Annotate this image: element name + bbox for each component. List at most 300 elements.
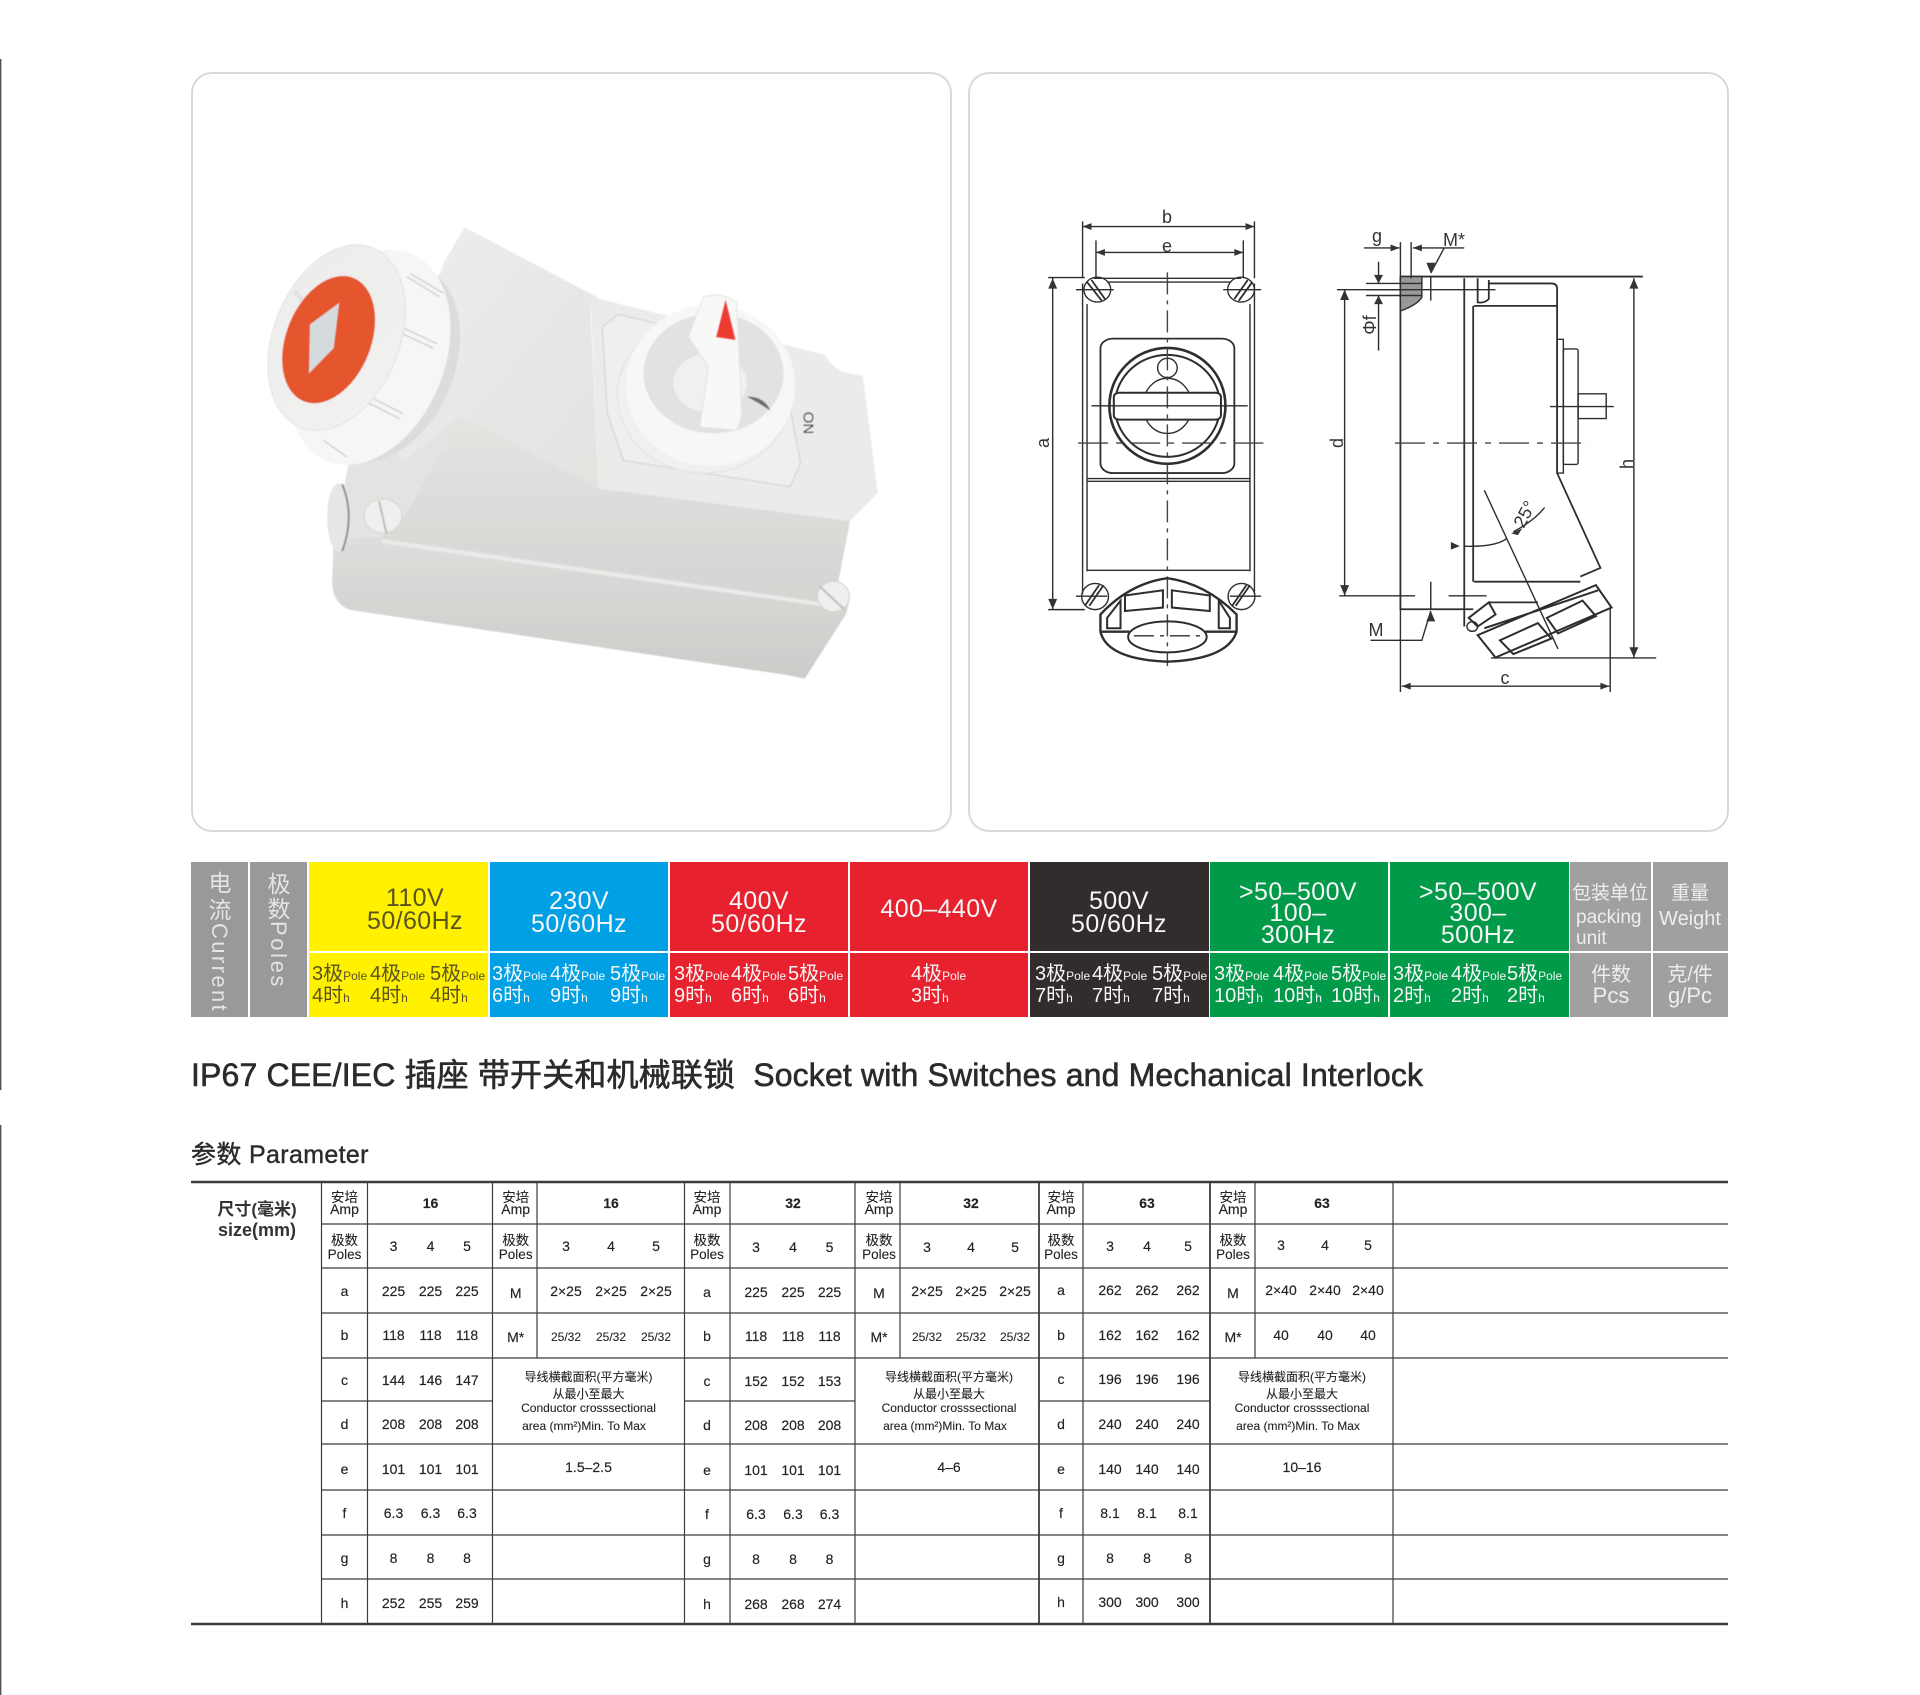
column group 1: d [341, 1416, 348, 1432]
column group 5: 极数 [1048, 1233, 1075, 1248]
column group 2: 极数 [502, 1233, 530, 1248]
pole and hour labels: 6时 [788, 984, 819, 1007]
dimension letters: b [1162, 207, 1172, 227]
pole and hour labels: h [461, 991, 468, 1005]
column group 2: 25/32 [551, 1330, 581, 1344]
column group 4: 2×25 [955, 1283, 987, 1299]
voltage headings: 300– [1449, 899, 1507, 927]
pole and hour labels: 5极 [1152, 962, 1183, 985]
pole and hour labels: 4时 [312, 984, 343, 1007]
column group 5: h [1057, 1594, 1065, 1610]
column group 1: 146 [419, 1372, 442, 1388]
column group 4: 25/32 [956, 1330, 986, 1344]
dimension letters: M* [1443, 230, 1465, 250]
pole and hour labels: h [1123, 991, 1130, 1005]
column group 3: f [705, 1506, 709, 1522]
column group 3: 6.3 [783, 1506, 803, 1522]
column group 1: 6.3 [384, 1505, 403, 1521]
column group 6: 40 [1360, 1327, 1376, 1343]
column group 2: 16 [603, 1195, 619, 1211]
column group 4: 3 [923, 1239, 931, 1255]
packing and weight headings: packing [1576, 907, 1642, 928]
column group 3: 118 [782, 1328, 804, 1344]
column group 3: 152 [781, 1373, 805, 1389]
column group 1: 144 [382, 1372, 405, 1388]
column group 4: 从最小至最大 [913, 1387, 985, 1401]
column group 2: area (mm²)Min. To Max [522, 1419, 646, 1433]
heading: current [207, 870, 232, 1013]
column group 4: area (mm²)Min. To Max [883, 1419, 1007, 1433]
column group 5: 8.1 [1178, 1505, 1198, 1521]
pole and hour labels: 4极 [1451, 962, 1482, 985]
pole and hour labels: 3极 [492, 962, 523, 985]
column group 1: 101 [382, 1461, 405, 1477]
column group 5: 140 [1176, 1461, 1200, 1477]
column group 2: 安培 [502, 1190, 529, 1205]
pole and hour labels: 4时 [430, 984, 461, 1007]
pole and hour labels: Pole [1482, 969, 1506, 983]
column group 1: 118 [419, 1327, 442, 1343]
column group 1: 16 [423, 1195, 438, 1211]
pole and hour labels: h [1256, 991, 1263, 1005]
column group 2: 2×25 [640, 1283, 672, 1299]
column group 3: Poles [690, 1247, 724, 1262]
column group 5: d [1057, 1416, 1065, 1432]
column group 6: 40 [1273, 1327, 1289, 1343]
column group 2: Amp [501, 1201, 530, 1217]
label: size [217, 1199, 297, 1240]
column group 1: 3 [390, 1238, 398, 1254]
pole and hour labels: 5极 [788, 962, 819, 985]
column group 2: Poles [499, 1247, 533, 1262]
column group 5: 196 [1176, 1371, 1200, 1387]
column group 1: 6.3 [421, 1505, 440, 1521]
pole and hour labels: 4极 [1273, 962, 1304, 985]
column group 1: c [341, 1372, 348, 1388]
column group 4: 25/32 [1000, 1330, 1030, 1344]
column group 5: e [1057, 1461, 1065, 1477]
column group 2: 5 [652, 1238, 660, 1254]
pole and hour labels: 3极 [312, 962, 343, 985]
column group 3: g [703, 1551, 711, 1567]
column group 5: 8 [1143, 1550, 1151, 1566]
heading: poles: Poles [266, 921, 291, 989]
column group 1: 101 [455, 1461, 479, 1477]
column group 1: 6.3 [457, 1505, 477, 1521]
column group 4: 2×25 [999, 1283, 1031, 1299]
pole and hour labels: 7时 [1035, 984, 1066, 1007]
heading: poles [266, 871, 291, 989]
column group 3: 153 [818, 1373, 841, 1389]
product photo: socket with switch [242, 224, 878, 679]
dimension letters: M [1368, 620, 1384, 640]
column group 4: 5 [1011, 1239, 1019, 1255]
column group 3: Amp [693, 1201, 722, 1217]
column group 5: g [1057, 1550, 1065, 1566]
column group 6: 10–16 [1283, 1459, 1322, 1475]
packing and weight headings: Pcs [1593, 983, 1629, 1008]
pole and hour labels: h [523, 991, 530, 1005]
column group 2: 3 [562, 1238, 570, 1254]
dimension letters: g [1372, 226, 1382, 246]
label: ON: ON [800, 412, 817, 434]
column group 5: 63 [1139, 1195, 1155, 1211]
pole and hour labels: h [705, 991, 712, 1005]
column group 5: 240 [1176, 1416, 1200, 1432]
column group 3: 32 [785, 1195, 801, 1211]
heading: current: Current [207, 923, 232, 1013]
pole and hour labels: 5极 [430, 962, 461, 985]
pole and hour labels: 7时 [1092, 984, 1123, 1007]
pole and hour labels: Pole [1304, 969, 1328, 983]
column group 1: 147 [455, 1372, 479, 1388]
pole and hour labels: 9时 [610, 984, 641, 1007]
column group 6: 5 [1364, 1237, 1372, 1253]
column group 5: 140 [1098, 1461, 1122, 1477]
column group 6: M [1227, 1285, 1239, 1301]
column group 1: 225 [419, 1283, 442, 1299]
column group 4: 2×25 [911, 1283, 943, 1299]
column group 4: Amp [865, 1201, 894, 1217]
packing and weight headings [1572, 882, 1721, 1008]
column group 6: 极数 [1220, 1233, 1247, 1248]
packing and weight headings: 件数 [1591, 963, 1631, 986]
column group 3: d [703, 1417, 711, 1433]
column group 3: a [703, 1284, 711, 1300]
column group 6: Conductor crosssectional [1235, 1401, 1369, 1415]
column group 5: 262 [1098, 1282, 1122, 1298]
column group 1: 259 [455, 1595, 479, 1611]
voltage headings: >50–500V [1419, 878, 1537, 906]
column group 6: area (mm²)Min. To Max [1236, 1419, 1360, 1433]
pole and hour labels: 4极 [550, 962, 581, 985]
column group 6 [1216, 1190, 1384, 1475]
column group 2: 从最小至最大 [552, 1387, 625, 1401]
pole and hour labels: Pole [1538, 969, 1562, 983]
pole and hour labels: h [1373, 991, 1380, 1005]
dimension letters: a [1033, 437, 1053, 448]
column group 5: c [1058, 1371, 1064, 1387]
column group 1: 208 [419, 1416, 442, 1432]
heading: poles: 数 [268, 896, 290, 922]
column group 3 [690, 1190, 841, 1612]
dimension letters: Φf [1360, 314, 1380, 335]
voltage headings [367, 878, 1537, 949]
column group 1: a [341, 1283, 349, 1299]
pole and hour labels: 2时 [1393, 984, 1424, 1007]
column group 3: 208 [744, 1417, 768, 1433]
column group 2 [499, 1190, 672, 1475]
colour voltage table [191, 862, 1728, 1017]
column group 3: 118 [818, 1328, 841, 1344]
column group 1: 255 [419, 1595, 442, 1611]
column group 5 [1044, 1190, 1200, 1610]
packing and weight headings: unit [1576, 928, 1607, 949]
pole and hour labels: h [1424, 991, 1431, 1005]
column group 4: 4–6 [937, 1459, 961, 1475]
column group 6: 63 [1314, 1195, 1330, 1211]
pole and hour labels: 10时 [1273, 984, 1315, 1007]
column group 5: 262 [1135, 1282, 1159, 1298]
column group 4: M [873, 1285, 885, 1301]
pole and hour labels: h [343, 991, 350, 1005]
column group 4: Conductor crosssectional [882, 1401, 1016, 1415]
pole and hour labels: 6时 [731, 984, 762, 1007]
pole and hour labels: Pole [461, 969, 485, 983]
column group 5: 300 [1098, 1594, 1122, 1610]
column group 1: 118 [456, 1327, 478, 1343]
pole and hour labels: h [1183, 991, 1190, 1005]
voltage headings: 50/60Hz [711, 910, 807, 938]
pole and hour labels: Pole [401, 969, 425, 983]
column group 5: 300 [1176, 1594, 1200, 1610]
pole and hour labels: 7时 [1152, 984, 1183, 1007]
pole and hour labels: 3极 [1393, 962, 1424, 985]
heading: parameter: 参数 Parameter [191, 1141, 369, 1169]
column group 6: 3 [1277, 1237, 1285, 1253]
column group 6: 2×40 [1265, 1282, 1297, 1298]
left edge line [0, 59, 1, 1695]
column group 3: 安培 [694, 1190, 720, 1205]
voltage headings: 50/60Hz [531, 910, 627, 938]
dimension letters: h [1617, 459, 1637, 469]
pole and hour labels: 6时 [492, 984, 523, 1007]
voltage headings: 50/60Hz [367, 907, 463, 935]
dimension letters: c [1500, 668, 1510, 688]
column group 5: 140 [1135, 1461, 1159, 1477]
column group 1: Amp [330, 1201, 359, 1217]
column group 5: 196 [1135, 1371, 1159, 1387]
column group 5: 8 [1184, 1550, 1192, 1566]
pole and hour labels: 5极 [610, 962, 641, 985]
pole and hour labels: 4极 [370, 962, 401, 985]
column group 3: 8 [752, 1551, 760, 1567]
pole and hour labels: 3时 [911, 984, 942, 1007]
column group 3: 225 [744, 1284, 768, 1300]
column group 4: 4 [967, 1239, 975, 1255]
column group 1: 252 [382, 1595, 405, 1611]
column group 3: 118 [745, 1328, 767, 1344]
column group 5: Amp [1047, 1201, 1076, 1217]
heading: poles: 极 [268, 871, 290, 897]
voltage headings: 110V [386, 884, 444, 912]
pole and hour labels: Pole [705, 969, 729, 983]
column group 2: 导线横截面积(平方毫米) [524, 1369, 652, 1384]
pole and hour labels: h [1066, 991, 1073, 1005]
column group 3: 5 [826, 1239, 834, 1255]
column group 3: 208 [818, 1417, 841, 1433]
column group 4: 25/32 [912, 1330, 942, 1344]
column group 5: 262 [1176, 1282, 1200, 1298]
pole and hour labels: 4时 [370, 984, 401, 1007]
packing and weight headings: Weight [1659, 908, 1721, 930]
column group 3: 3 [752, 1239, 760, 1255]
pole and hour labels: Pole [1245, 969, 1269, 983]
parameter table [191, 1182, 1728, 1624]
column group 6: Amp [1219, 1201, 1248, 1217]
column group 1: 极数 [331, 1233, 358, 1248]
colour cells [191, 862, 1728, 1017]
voltage headings: 50/60Hz [1071, 910, 1167, 938]
pole and hour labels: h [1538, 991, 1545, 1005]
column group 5: 162 [1135, 1327, 1159, 1343]
pole and hour labels: h [819, 991, 826, 1005]
column group 5: 8 [1106, 1550, 1114, 1566]
voltage headings: 230V [549, 887, 609, 915]
column group 3: 101 [744, 1462, 768, 1478]
column group 1: 101 [419, 1461, 442, 1477]
column group 5: 5 [1184, 1238, 1192, 1254]
pole and hour labels: h [762, 991, 769, 1005]
pole and hour labels: 10时 [1214, 984, 1256, 1007]
pole and hour labels: Pole [1066, 969, 1090, 983]
column group 6: 从最小至最大 [1266, 1387, 1338, 1401]
column group 1: 208 [382, 1416, 405, 1432]
column group 3: 6.3 [820, 1506, 839, 1522]
column group 2: 2×25 [550, 1283, 582, 1299]
column group 3: h [703, 1596, 711, 1612]
column group 1: Poles [328, 1247, 362, 1262]
pole and hour labels: Pole [1362, 969, 1386, 983]
column group 1: 225 [455, 1283, 479, 1299]
column group 2: 4 [607, 1238, 615, 1254]
voltage headings: 400–440V [880, 895, 998, 923]
dimension letters: d [1327, 438, 1347, 448]
voltage headings: 100– [1269, 899, 1327, 927]
heading: current: 电 [208, 870, 232, 896]
pole and hour labels: 2时 [1507, 984, 1538, 1007]
column group 5: Poles [1044, 1247, 1078, 1262]
packing and weight headings: 克/件 [1667, 963, 1713, 986]
column group 6: 40 [1317, 1327, 1333, 1343]
column group 1: 8 [427, 1550, 435, 1566]
column group 3: 101 [818, 1462, 841, 1478]
column group 3: 6.3 [746, 1506, 766, 1522]
column group 3: 152 [744, 1373, 768, 1389]
column group 1: e [341, 1461, 349, 1477]
voltage headings: 500Hz [1441, 921, 1515, 949]
pole and hour labels: h [942, 991, 949, 1005]
panel: product photo [192, 73, 951, 831]
column group 3: 274 [818, 1596, 841, 1612]
column group 1: g [341, 1550, 348, 1566]
column group 1: 208 [455, 1416, 479, 1432]
pole and hour labels: 10时 [1331, 984, 1373, 1007]
pole and hour labels: h [1482, 991, 1489, 1005]
dimension letters [1033, 207, 1637, 688]
dimension letters: 25° [1509, 497, 1540, 531]
pole and hour labels: 3极 [1035, 962, 1066, 985]
column group 6: Poles [1216, 1247, 1250, 1262]
column group 5: 8.1 [1137, 1505, 1157, 1521]
pole and hour labels: Pole [1123, 969, 1147, 983]
voltage headings: 500V [1089, 887, 1149, 915]
heading: current: 流 [208, 897, 232, 923]
column group 2: 1.5–2.5 [565, 1459, 612, 1475]
column group 3: 225 [818, 1284, 841, 1300]
column group 6: M* [1224, 1329, 1242, 1345]
packing and weight headings: g/Pc [1668, 983, 1712, 1008]
title: IP67 CEE/IEC 插座 带开关和机械联锁 Socket with Switches and Mechanical Interlock [191, 1057, 1424, 1093]
label: size: size(mm) [218, 1220, 296, 1240]
pole and hour labels: 9时 [674, 984, 705, 1007]
column group 3: e [703, 1462, 711, 1478]
voltage headings: 400V [729, 887, 789, 915]
packing and weight headings: 包装单位 [1572, 882, 1648, 904]
column group 5: 240 [1135, 1416, 1159, 1432]
pole and hour labels: 5极 [1507, 962, 1538, 985]
column group 3: 268 [744, 1596, 768, 1612]
column group 2: 25/32 [641, 1330, 671, 1344]
column group 1: 5 [463, 1238, 471, 1254]
column group 2: M [510, 1285, 522, 1301]
pole and hour labels: Pole [1183, 969, 1207, 983]
column group 1: 8 [390, 1550, 398, 1566]
pole and hour labels: 3极 [674, 962, 705, 985]
column group 6: 2×40 [1352, 1282, 1384, 1298]
column group 3: 8 [826, 1551, 834, 1567]
pole and hour labels: h [641, 991, 648, 1005]
column group 1: 4 [427, 1238, 435, 1254]
column group 2: M* [507, 1329, 525, 1345]
column group 5: f [1059, 1505, 1063, 1521]
pole and hour labels: h [581, 991, 588, 1005]
column group 1: 8 [463, 1550, 471, 1566]
column group 3: 极数 [694, 1233, 721, 1248]
table grid [191, 1182, 1728, 1624]
pole and hour labels: Pole [581, 969, 605, 983]
voltage headings: >50–500V [1239, 878, 1357, 906]
pole and hour labels: h [401, 991, 408, 1005]
column group 5: a [1057, 1282, 1065, 1298]
column group 3: 101 [781, 1462, 805, 1478]
column group 6: 导线横截面积(平方毫米) [1238, 1369, 1366, 1384]
column group 3: b [703, 1328, 711, 1344]
column group 3: 4 [789, 1239, 797, 1255]
column group 3: 8 [789, 1551, 797, 1567]
column group 4: 导线横截面积(平方毫米) [885, 1369, 1013, 1384]
packing and weight headings: 重量 [1671, 882, 1709, 904]
arrowheads [1048, 223, 1638, 690]
column group 5: 3 [1106, 1238, 1114, 1254]
column group 5: 300 [1135, 1594, 1159, 1610]
column group 4: Poles [862, 1247, 896, 1262]
pole and hour labels: 4极 [911, 962, 942, 985]
pole and hour labels [312, 962, 1562, 1007]
column group 4: M* [870, 1329, 888, 1345]
column group 4 [862, 1190, 1031, 1475]
column group 1: b [341, 1327, 349, 1343]
column group 6: 2×40 [1309, 1282, 1341, 1298]
column group 5: b [1057, 1327, 1065, 1343]
column group 1: 118 [382, 1327, 405, 1343]
pole and hour labels: Pole [343, 969, 367, 983]
column group 4: 极数 [866, 1233, 893, 1248]
pole and hour labels: 2时 [1451, 984, 1482, 1007]
pole and hour labels: 5极 [1331, 962, 1362, 985]
label: size: 尺寸(毫米) [217, 1199, 297, 1219]
column group 3: 208 [781, 1417, 805, 1433]
column group 2: Conductor crosssectional [521, 1401, 656, 1415]
column group 2: 2×25 [595, 1283, 627, 1299]
column group 1: h [341, 1595, 348, 1611]
column group 5: 240 [1098, 1416, 1122, 1432]
column group 4: 32 [963, 1195, 979, 1211]
pole and hour labels: Pole [819, 969, 843, 983]
column group 5: 162 [1176, 1327, 1200, 1343]
voltage headings: 300Hz [1261, 921, 1335, 949]
pole and hour labels: 9时 [550, 984, 581, 1007]
